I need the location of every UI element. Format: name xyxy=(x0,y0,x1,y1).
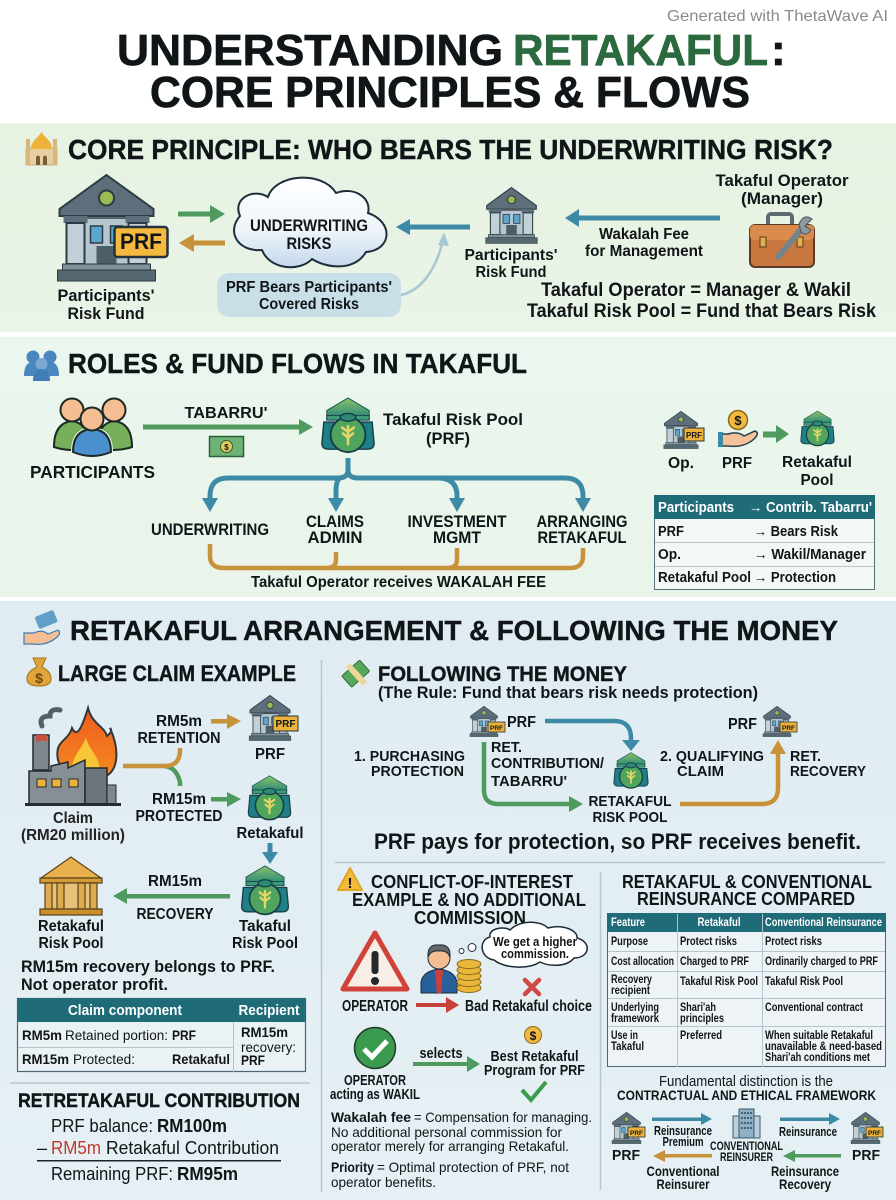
text: priority explanation: operator benefits. xyxy=(331,1174,436,1190)
icon: PRF bank left: PRF xyxy=(490,725,503,732)
text: priority explanation: = Optimal protection of PRF, not xyxy=(377,1159,569,1175)
statement: operator and pool definitions: Takaful Risk Pool = Fund that Bears Risk xyxy=(527,300,876,322)
table: comparison: Recovery xyxy=(611,972,652,986)
heading: core principle: CORE PRINCIPLE: WHO BEARS THE UNDERWRITING RISK? xyxy=(68,134,833,165)
title: UNDERSTANDING xyxy=(117,26,503,75)
arrow: orange back xyxy=(653,1150,712,1162)
labels: op prf retakaful pool: Pool xyxy=(800,472,834,489)
title: CORE PRINCIPLES & FLOWS xyxy=(150,68,750,117)
table: comparison: Underlying xyxy=(611,1000,659,1014)
label: operator: OPERATOR xyxy=(342,998,408,1015)
label: qualifying claim: 2. QUALIFYING xyxy=(660,748,764,765)
label: retakaful risk pool: RISK POOL xyxy=(592,809,668,826)
table: claim component: Protected: xyxy=(73,1051,135,1067)
heading: conflict of interest xyxy=(352,872,586,928)
icon: conventional reinsurer building xyxy=(733,1109,760,1138)
label: reinsurance recovery: Recovery xyxy=(779,1176,831,1192)
watermark: Generated with ThetaWave AI xyxy=(667,8,888,25)
panel: core principle xyxy=(0,123,896,332)
labels: four operator functions: INVESTMENT xyxy=(408,513,506,531)
label: takaful risk pool xyxy=(232,918,298,952)
icon: briefcase with wrench xyxy=(750,214,814,267)
label: qualifying claim xyxy=(660,748,764,780)
statement: recovery belongs to PRF: RM15m recovery belongs to PRF. xyxy=(21,957,275,976)
icon: retakaful risk pool temple xyxy=(40,857,102,915)
labels: four operator functions: ARRANGING xyxy=(536,513,628,531)
table: comparison: Protect risks xyxy=(680,934,737,948)
divider xyxy=(600,872,602,1190)
label: conventional reinsurer bottom xyxy=(646,1163,720,1192)
icon: underwriting risks cloud xyxy=(234,178,387,267)
heading: compared xyxy=(622,871,872,909)
table: claim component: PRF xyxy=(241,1052,265,1068)
label: reinsurance recovery xyxy=(771,1163,839,1192)
label: reinsurance: Reinsurance xyxy=(779,1124,837,1139)
calculation: PRF balance: RM100m xyxy=(157,1116,227,1136)
chart: wakalah fee bracket xyxy=(210,544,583,568)
icon: participants' risk fund small bank xyxy=(486,188,537,243)
icon: underwriting risks cloud: RISKS xyxy=(286,234,332,253)
icon: underwriting risks cloud: UNDERWRITING xyxy=(250,216,368,235)
label: takaful operator: (Manager) xyxy=(741,189,823,208)
arrow: blue PRF to pool xyxy=(545,721,640,751)
labels: four operator functions: RETAKAFUL xyxy=(538,529,626,547)
table: comparison: Feature xyxy=(611,915,645,929)
statement: fundamental distinction xyxy=(617,1073,876,1103)
section: following the money xyxy=(342,660,866,854)
heading: retakaful arrangement: RETAKAFUL ARRANGEMENT & FOLLOWING THE MONEY xyxy=(70,615,838,646)
label: rm15m protected: RM15m xyxy=(152,791,206,808)
table: comparison: Conventional contract xyxy=(765,1000,863,1014)
icon: coin xyxy=(524,1026,542,1044)
icon: operator bank: PRF xyxy=(686,431,702,440)
label: reinsurance premium: Premium xyxy=(662,1134,704,1149)
label: qualifying claim: CLAIM xyxy=(677,763,724,780)
label: participants: PARTICIPANTS xyxy=(30,462,155,482)
table: comparison: Shari'ah xyxy=(680,1000,716,1014)
labels: op prf retakaful pool: PRF xyxy=(722,455,752,472)
calculation: PRF balance: RM95m xyxy=(177,1164,238,1184)
table: roles summary xyxy=(654,495,875,590)
table: claim component: Claim component xyxy=(68,1003,182,1019)
label: takaful operator xyxy=(716,171,849,208)
chart: fund flow tree xyxy=(202,458,591,512)
arrow: selects xyxy=(413,1056,480,1072)
icon: PRF bank: PRF xyxy=(276,719,296,730)
arrow: green contribution xyxy=(484,742,583,812)
labels: op prf retakaful pool xyxy=(668,454,852,489)
arrow: protected to retakaful xyxy=(211,792,241,807)
icon: PRF bank left xyxy=(470,706,505,737)
statement: PRF pays for protection: PRF pays for protection, so PRF receives benefit. xyxy=(374,829,861,854)
label: operator acting as wakil: acting as WAKIL xyxy=(330,1087,420,1103)
title: : xyxy=(771,26,786,75)
label: best retakaful program xyxy=(484,1048,585,1079)
label: selects: selects xyxy=(420,1045,462,1062)
table: comparison: Preferred xyxy=(680,1028,722,1042)
icon: PRF bank left xyxy=(612,1112,645,1144)
table: claim component: recovery: xyxy=(241,1039,296,1055)
heading: roles and fund flows: ROLES & FUND FLOWS IN TAKAFUL xyxy=(68,348,527,379)
statement: recovery belongs to PRF xyxy=(21,957,275,994)
labels: op prf retakaful pool: Retakaful xyxy=(782,454,852,471)
label: PRF left: PRF xyxy=(507,714,536,731)
label: participants' risk fund small xyxy=(464,247,558,281)
label: wakalah fee xyxy=(585,226,703,260)
icon: takaful risk pool xyxy=(242,866,288,914)
table: roles summary: → Contrib. Tabarru' xyxy=(749,500,872,516)
table: comparison: Protect risks xyxy=(765,934,822,948)
icon: money bag xyxy=(27,658,51,686)
icon: small warning: ! xyxy=(348,875,352,892)
heading: retretakaful contribution: RETRETAKAFUL CONTRIBUTION xyxy=(18,1090,300,1112)
arrow: recovery xyxy=(113,888,230,904)
label: conventional reinsurer: CONVENTIONAL xyxy=(710,1139,783,1153)
arrow: orange from cloud xyxy=(179,234,225,252)
section: retakaful vs conventional xyxy=(607,871,886,1192)
icon: participants' risk fund bank with PRF sign xyxy=(58,175,168,281)
icon: PRF bank right xyxy=(851,1112,883,1144)
label: best retakaful program: Program for PRF xyxy=(484,1062,585,1079)
icon: PRF bank left: PRF xyxy=(630,1130,643,1137)
text: priority explanation xyxy=(331,1159,569,1190)
section: conflict of interest xyxy=(330,868,592,1190)
icon: PRF bank right xyxy=(763,706,797,737)
label: ret recovery: RET. xyxy=(790,748,821,765)
icon: retakaful pool xyxy=(248,776,291,820)
arrow: tabarru' contribution xyxy=(143,419,313,435)
label: rm5m retention: RETENTION xyxy=(138,730,220,747)
arrow: reinsurance xyxy=(780,1113,840,1125)
callout: thought bubble xyxy=(459,922,587,967)
label: ret recovery xyxy=(790,748,866,780)
table: comparison: Takaful Risk Pool xyxy=(680,974,758,988)
text: priority explanation: Priority xyxy=(331,1159,374,1175)
label: claim rm20 million xyxy=(21,810,125,844)
statement: operator and pool definitions xyxy=(527,279,876,322)
text: wakalah fee explanation xyxy=(331,1109,592,1154)
icon: small warning xyxy=(338,868,362,892)
table: comparison: framework xyxy=(611,1011,659,1025)
labels: four operator functions: ADMIN xyxy=(308,529,362,547)
subheading: the rule: (The Rule: Fund that bears risk needs protection) xyxy=(378,684,758,702)
label: retakaful: Retakaful xyxy=(236,825,304,842)
table: comparison: Purpose xyxy=(611,934,648,948)
icon: green check circle xyxy=(354,1028,396,1068)
table: claim component: PRF xyxy=(172,1027,196,1043)
icon: hand with coin: $ xyxy=(734,413,742,428)
label: takaful risk pool xyxy=(383,410,523,448)
label: PRF right: PRF xyxy=(852,1148,880,1164)
label: conventional reinsurer xyxy=(710,1139,783,1164)
table: comparison: Retakaful xyxy=(698,915,740,929)
label: participants' risk fund: Risk Fund xyxy=(68,305,144,323)
label: claim rm20 million: Claim xyxy=(53,810,93,827)
arrow: green back xyxy=(783,1150,841,1162)
label: rm15m recovery: RM15m xyxy=(148,873,202,890)
icon: mosque xyxy=(26,132,57,165)
calculation: PRF balance: PRF balance: xyxy=(51,1116,153,1136)
arrow: retention to PRF xyxy=(211,714,241,729)
arrow: premium xyxy=(652,1113,712,1125)
heading: compared: REINSURANCE COMPARED xyxy=(637,888,855,909)
labels: four operator functions: CLAIMS xyxy=(306,513,364,531)
table: roles summary: → Wakil/Manager xyxy=(754,547,866,563)
label: purchasing protection: PROTECTION xyxy=(371,763,464,780)
labels: op prf retakaful pool: Op. xyxy=(668,455,694,472)
label: claim rm20 million: (RM20 million) xyxy=(21,827,125,844)
arrow: to retakaful pool xyxy=(763,425,789,443)
label: rm5m retention: RM5m xyxy=(156,713,202,730)
label: takaful risk pool: Takaful xyxy=(239,918,291,935)
label: participants' risk fund: Participants' xyxy=(58,287,155,305)
label: reinsurance premium: Reinsurance xyxy=(654,1123,712,1138)
table: roles summary: → Protection xyxy=(754,570,836,586)
arrow: down to takaful pool xyxy=(262,843,278,864)
label: wakalah fee: for Management xyxy=(585,243,703,260)
icon: money bag: $ xyxy=(35,670,43,686)
label: rm15m recovery: RECOVERY xyxy=(136,906,214,923)
label: PRF left: PRF xyxy=(612,1148,640,1164)
icon: factory on fire xyxy=(25,708,121,806)
label: operator receives wakalah fee: Takaful Operator receives WAKALAH FEE xyxy=(251,574,546,591)
label: conventional reinsurer bottom: Conventional xyxy=(646,1163,720,1179)
calculation: PRF balance xyxy=(37,1116,281,1184)
calculation: PRF balance: – xyxy=(37,1138,47,1158)
label: wakalah fee: Wakalah Fee xyxy=(599,226,689,243)
labels: four operator functions: UNDERWRITING xyxy=(151,521,269,539)
heading: large claim example: LARGE CLAIM EXAMPLE xyxy=(58,661,296,686)
icon: retakaful pool xyxy=(801,411,834,446)
callout: PRF bears participants' covered risks: PRF Bears Participants' xyxy=(226,279,392,296)
label: operator acting as wakil xyxy=(330,1073,420,1103)
label: tabarru': TABARRU' xyxy=(184,405,268,422)
label: ret contribution tabarru: TABARRU' xyxy=(491,773,567,790)
icon: takaful risk pool xyxy=(322,398,374,452)
table: comparison: principles xyxy=(680,1011,724,1025)
label: rm5m retention xyxy=(138,713,220,747)
table: roles summary: PRF xyxy=(658,524,684,540)
icon: warning triangle xyxy=(343,933,407,989)
text: wakalah fee explanation: operator merely for arranging Retakaful. xyxy=(331,1138,569,1154)
table: comparison: Charged to PRF xyxy=(680,954,749,968)
text: wakalah fee explanation: = Compensation for managing. xyxy=(414,1109,592,1125)
icon: banknote: $ xyxy=(224,443,229,452)
table: comparison: Takaful Risk Pool xyxy=(765,974,843,988)
label: rm15m recovery xyxy=(136,873,214,923)
table: claim component: RM15m xyxy=(22,1051,69,1067)
table: claim component: Recipient xyxy=(238,1003,300,1019)
label: bad retakaful choice: Bad Retakaful choice xyxy=(465,998,592,1015)
table: roles summary: → Bears Risk xyxy=(754,524,839,540)
connector: claim split xyxy=(123,748,180,786)
label: takaful risk pool: (PRF) xyxy=(426,429,470,448)
arrow: bad choice xyxy=(416,997,459,1013)
icon: people heading xyxy=(24,350,59,381)
statement: recovery belongs to PRF: Not operator profit. xyxy=(21,975,168,994)
calculation: PRF balance: Remaining PRF: xyxy=(51,1164,173,1184)
table: comparison: Takaful xyxy=(611,1039,644,1053)
label: rm15m protected: PROTECTED xyxy=(136,808,222,825)
text: wakalah fee explanation: No additional personal commission for xyxy=(331,1124,562,1140)
arrow: operator to fund xyxy=(565,209,720,227)
callout: thought bubble: commission. xyxy=(501,946,569,961)
icon: PRF bank right: PRF xyxy=(868,1130,881,1137)
label: PRF: PRF xyxy=(255,746,285,763)
icon: participants' risk fund bank with PRF sign: PRF xyxy=(120,229,162,254)
label: takaful risk pool: Takaful Risk Pool xyxy=(383,410,523,429)
panel: retakaful arrangement xyxy=(0,601,896,1200)
arrow: green to cloud xyxy=(178,205,225,223)
calculation: PRF balance: Retakaful Contribution xyxy=(106,1138,279,1158)
label: ret recovery: RECOVERY xyxy=(790,763,866,780)
icon: cash xyxy=(342,660,370,687)
label: ret contribution tabarru: CONTRIBUTION/ xyxy=(491,755,605,772)
icon: operator bank xyxy=(664,411,704,449)
section: large claim example xyxy=(10,658,310,1184)
label: purchasing protection xyxy=(354,748,465,780)
label: operator acting as wakil: OPERATOR xyxy=(344,1073,406,1089)
label: PRF right: PRF xyxy=(728,716,757,733)
icon: PRF bank xyxy=(249,695,298,741)
label: retakaful risk pool: RETAKAFUL xyxy=(588,793,672,810)
table: claim component: RM15m xyxy=(241,1024,288,1040)
label: ret contribution tabarru: RET. xyxy=(491,739,522,756)
panel: roles and fund flows xyxy=(0,337,896,597)
label: best retakaful program: Best Retakaful xyxy=(490,1048,578,1065)
icon: PRF bank right: PRF xyxy=(782,725,795,732)
arrow: fund to cloud xyxy=(396,219,470,235)
divider xyxy=(10,1082,310,1084)
icon: coin: $ xyxy=(530,1029,537,1043)
divider xyxy=(335,862,885,864)
label: rm15m protected xyxy=(136,791,222,825)
label: retakaful risk pool xyxy=(38,918,104,952)
label: ret contribution tabarru xyxy=(491,739,605,790)
table: claim component: Retained portion: xyxy=(65,1027,168,1043)
table: roles summary: Retakaful Pool xyxy=(658,570,751,586)
label: conventional reinsurer: REINSURER xyxy=(720,1150,773,1164)
icon: green tick xyxy=(522,1082,546,1100)
statement: operator and pool definitions: Takaful Operator = Manager & Wakil xyxy=(541,279,851,301)
label: participants' risk fund xyxy=(58,287,155,323)
table: roles summary: Participants xyxy=(658,500,734,516)
icon: operator with coins xyxy=(421,945,481,993)
label: takaful risk pool: Risk Pool xyxy=(232,935,298,952)
divider: main columns xyxy=(320,660,322,1192)
table: comparison: Cost allocation xyxy=(611,954,674,968)
table: roles summary: Op. xyxy=(658,547,681,563)
callout: PRF bears participants' covered risks xyxy=(217,273,401,317)
icon: participants group xyxy=(54,398,132,456)
title: RETAKAFUL xyxy=(513,26,768,75)
label: retakaful risk pool: Retakaful xyxy=(38,918,104,935)
heading: following the money: FOLLOWING THE MONEY xyxy=(378,662,627,686)
icon: hand with card xyxy=(24,610,60,644)
arrow: curved callout to flow xyxy=(401,232,449,295)
label: takaful operator: Takaful Operator xyxy=(716,171,849,190)
labels: four operator functions: MGMT xyxy=(433,529,481,547)
table: comparison: Use in xyxy=(611,1028,638,1042)
label: reinsurance premium xyxy=(654,1123,712,1149)
heading: conflict of interest: COMMISSION xyxy=(414,908,526,928)
callout: PRF bears participants' covered risks: Covered Risks xyxy=(259,296,359,313)
arrow: orange recovery xyxy=(680,740,786,804)
table: claim component: RM5m xyxy=(22,1027,62,1043)
table: comparison: recipient xyxy=(611,983,650,997)
label: purchasing protection: 1. PURCHASING xyxy=(354,748,465,765)
labels: four operator functions xyxy=(151,513,628,547)
text: wakalah fee explanation: Wakalah fee xyxy=(331,1109,411,1125)
table: claim component xyxy=(17,998,306,1072)
icon: retakaful risk pool xyxy=(614,753,648,788)
label: reinsurance recovery: Reinsurance xyxy=(771,1163,839,1179)
icon: red cross xyxy=(525,980,539,994)
label: participants' risk fund small: Participants' xyxy=(464,247,558,264)
icon: banknote xyxy=(210,436,244,456)
label: retakaful risk pool xyxy=(588,793,672,826)
table: claim component: Retakaful xyxy=(172,1051,230,1067)
heading: conflict of interest: CONFLICT-OF-INTEREST xyxy=(371,872,573,892)
calculation: PRF balance: RM5m xyxy=(51,1138,101,1158)
heading: conflict of interest: EXAMPLE & NO ADDITIONAL xyxy=(352,890,586,910)
icon: hand with coin xyxy=(718,410,757,447)
label: participants' risk fund small: Risk Fund xyxy=(476,264,546,281)
label: retakaful risk pool: Risk Pool xyxy=(38,935,104,952)
title xyxy=(117,26,786,117)
table: comparison xyxy=(607,913,886,1067)
callout: thought bubble: We get a higher xyxy=(493,934,577,949)
statement: fundamental distinction: Fundamental distinction is the xyxy=(659,1073,833,1090)
label: conventional reinsurer bottom: Reinsurer xyxy=(656,1176,710,1192)
